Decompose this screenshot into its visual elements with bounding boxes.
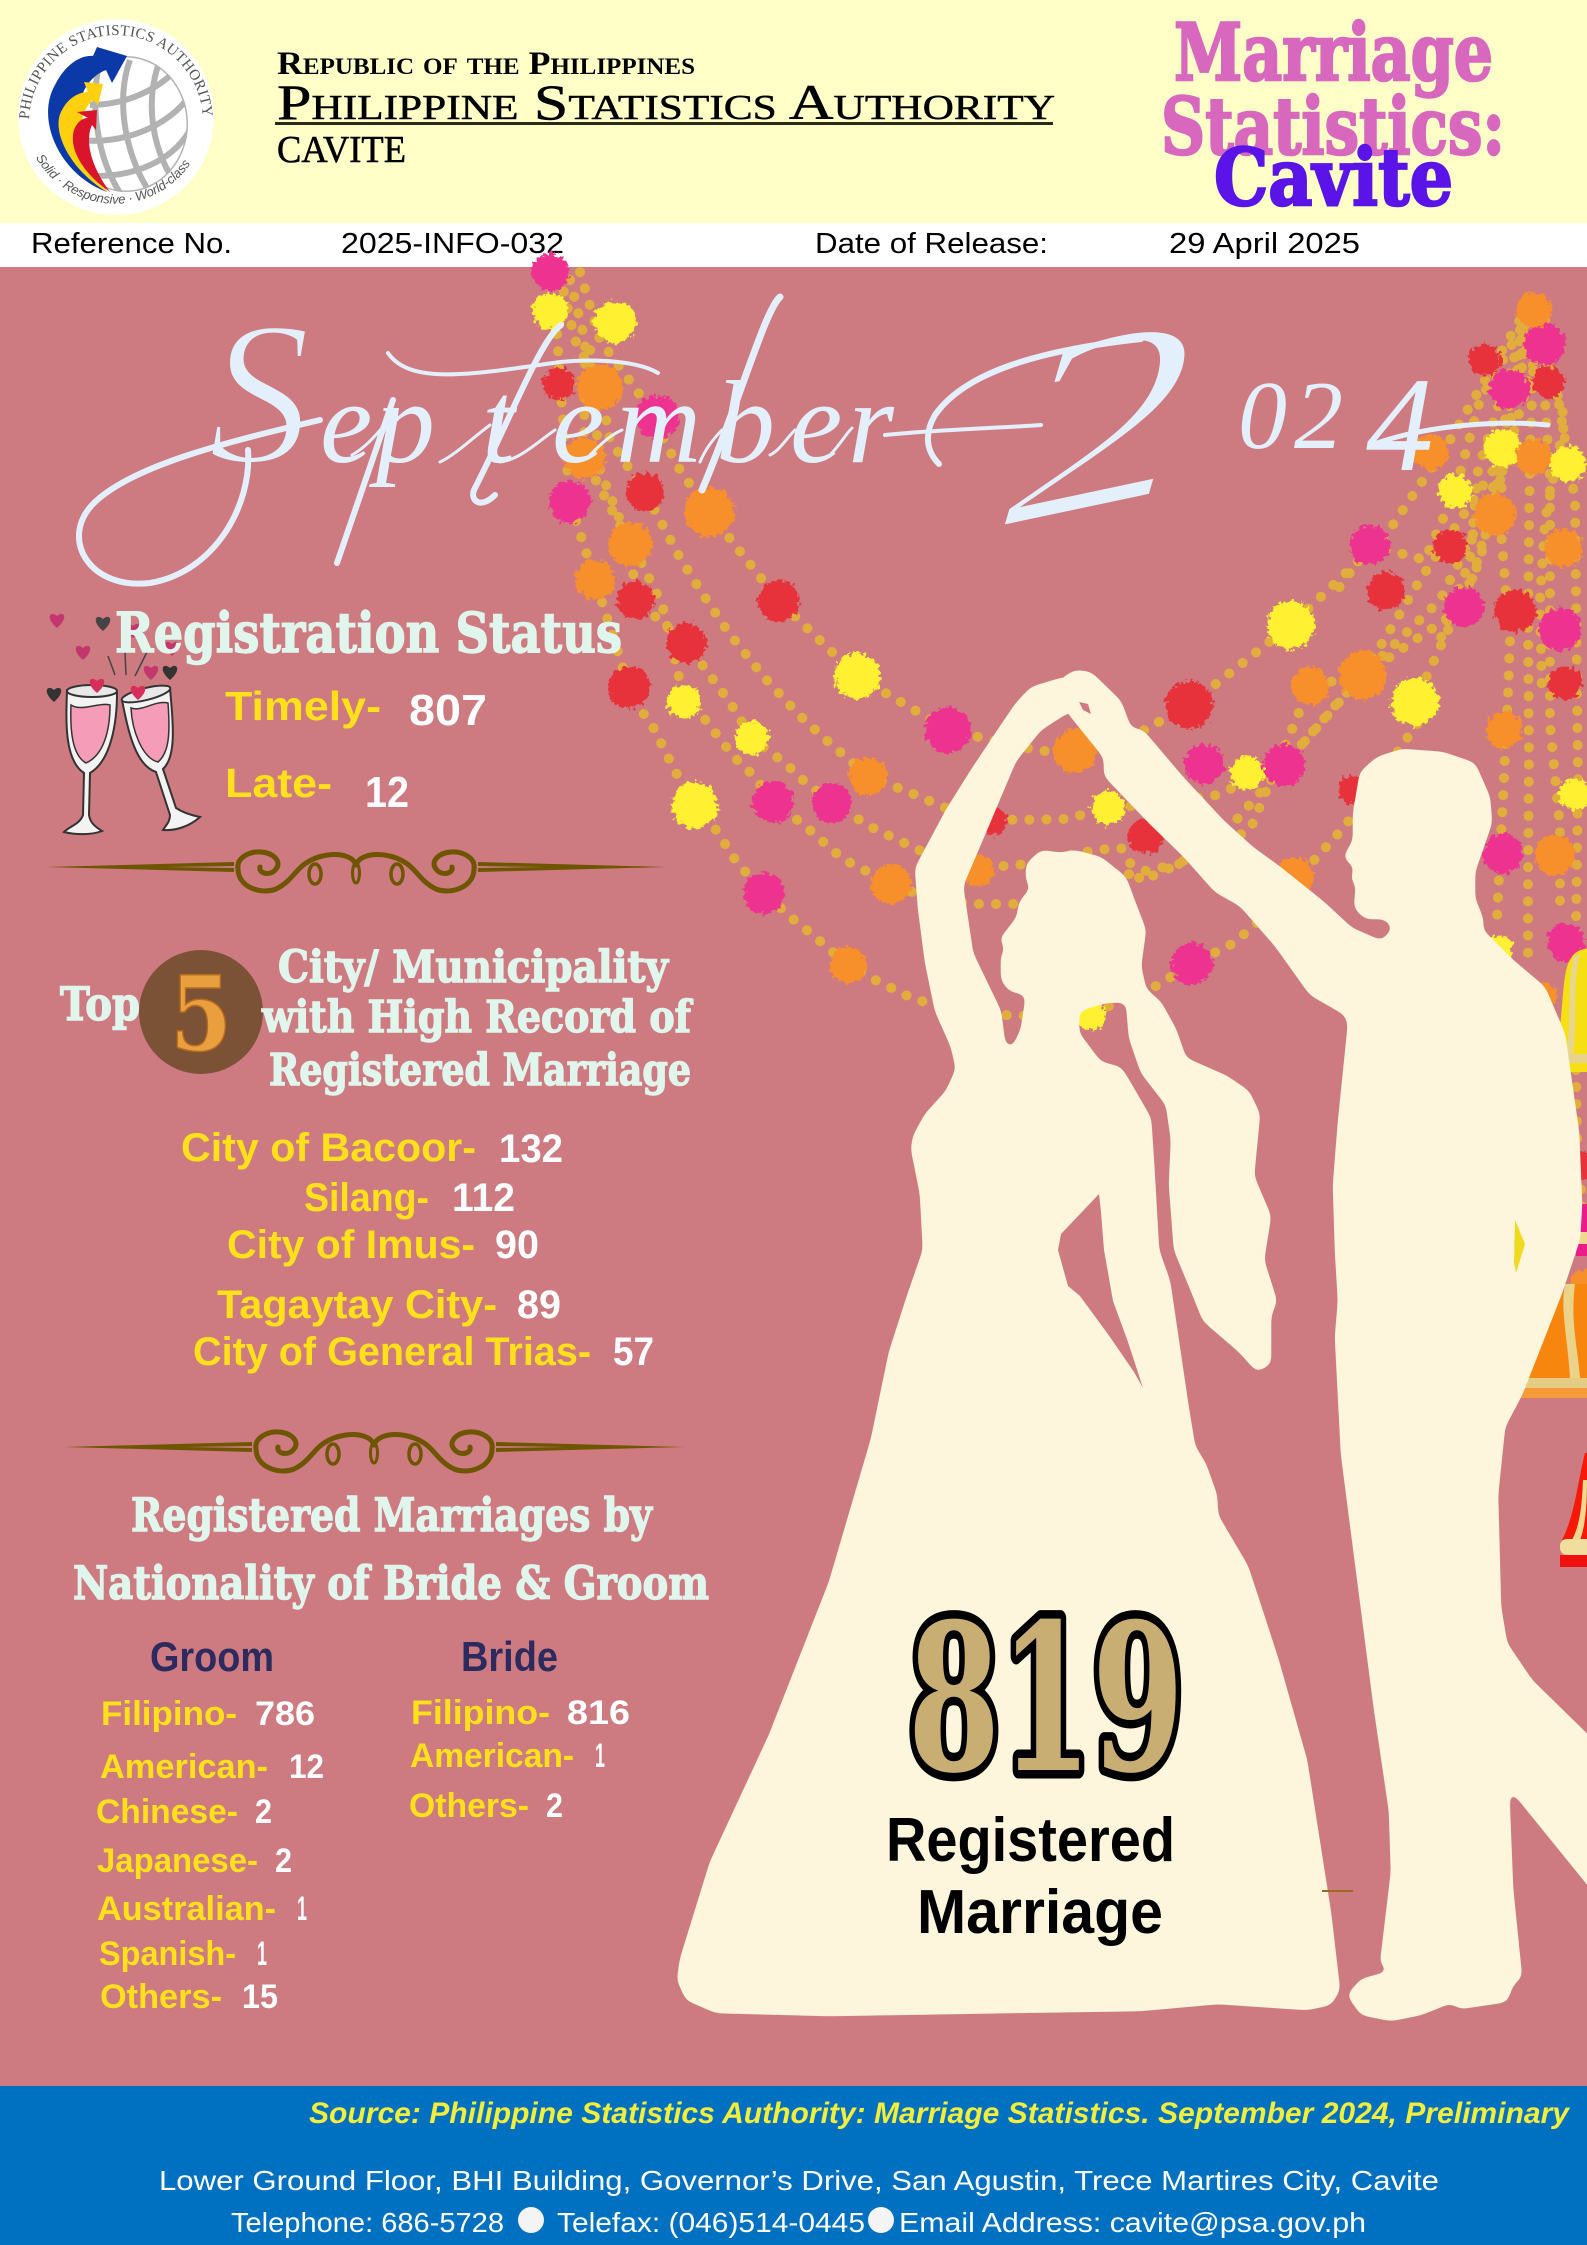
publication title: Marriage bbox=[1174, 6, 1493, 99]
title: September 2024: 4 bbox=[1366, 351, 1434, 500]
agency name block: CAVITE bbox=[277, 129, 406, 171]
list: groom nationality: 15 bbox=[242, 1978, 278, 2016]
agency name block bbox=[275, 46, 1055, 171]
list: groom nationality: 1 bbox=[257, 1935, 267, 1973]
list: groom nationality: 12 bbox=[289, 1748, 324, 1786]
title: September 2024 bbox=[79, 258, 1548, 584]
garland pom-poms bbox=[531, 253, 1587, 1298]
contact line: Telefax: (046)514-0445 bbox=[557, 2207, 865, 2238]
list: top 5 cities: City of Bacoor- bbox=[181, 1126, 476, 1170]
list: bride nationality: Bride bbox=[461, 1633, 558, 1680]
heading: registration status: Registration Status bbox=[115, 600, 622, 665]
key figure: 819 registered marriage: Registered bbox=[886, 1806, 1175, 1875]
agency name block: Republic of the Philippines bbox=[277, 46, 695, 82]
list: bride nationality bbox=[409, 1633, 630, 1825]
heading: nationality bbox=[73, 1488, 709, 1610]
list: groom nationality: Australian- bbox=[97, 1890, 276, 1928]
right glass bbox=[120, 682, 200, 830]
reference strip: Reference No. bbox=[31, 228, 232, 260]
ornamental divider 2 bbox=[64, 1432, 684, 1471]
waist gap in bride silhouette bbox=[1058, 1194, 1143, 1388]
list: groom nationality: 2 bbox=[255, 1793, 272, 1831]
list: groom nationality: Chinese- bbox=[96, 1793, 238, 1831]
key figure: 819 registered marriage: 819 bbox=[908, 1579, 1184, 1819]
list: top 5 cities: City of General Trias- bbox=[193, 1330, 591, 1374]
list: top 5 cities: City of Imus- bbox=[227, 1223, 475, 1267]
icon: wooden number 5 bbox=[139, 950, 263, 1075]
title: September 2024: 02 bbox=[1238, 362, 1343, 470]
key figure: 819 registered marriage: Marriage bbox=[917, 1878, 1163, 1947]
icon: wooden number 5: 5 bbox=[170, 954, 232, 1075]
heading: top 5: Registered Marriage bbox=[269, 1045, 691, 1096]
PSA logo: Solid · Responsive · World-class bbox=[36, 155, 190, 204]
small stray flourish end bbox=[1322, 1890, 1353, 1892]
agency name block: Philippine Statistics Authority bbox=[277, 74, 1055, 130]
heading: top 5: with High Record of bbox=[261, 992, 694, 1043]
heading: top 5 bbox=[60, 942, 694, 1096]
publication title bbox=[1161, 6, 1505, 224]
list: groom nationality: Japanese- bbox=[97, 1842, 258, 1880]
list: groom nationality: 1 bbox=[297, 1890, 307, 1928]
contact line: Email Address: cavite@psa.gov.ph bbox=[899, 2207, 1366, 2238]
registration status values: 12 bbox=[365, 768, 409, 817]
garland strings bbox=[555, 272, 1585, 1250]
left glass bbox=[64, 685, 117, 834]
silhouette: dancing bride bbox=[677, 674, 1340, 2016]
list: bride nationality: 1 bbox=[595, 1737, 605, 1775]
contact line bbox=[231, 2207, 1366, 2238]
registration status values bbox=[225, 683, 487, 817]
list: top 5 cities: 112 bbox=[452, 1176, 515, 1220]
hearts and sparkle lines bbox=[47, 614, 179, 702]
source note: Source: Philippine Statistics Authority: Marriage Statistics. September 2024, Preliminary bbox=[309, 2097, 1570, 2130]
header band bbox=[0, 0, 1587, 224]
registration status values: 807 bbox=[409, 686, 487, 735]
key figure: 819 registered marriage bbox=[886, 1579, 1184, 1947]
silhouette: dancing groom bbox=[1059, 670, 1587, 2021]
heading: nationality: Registered Marriages by bbox=[131, 1488, 653, 1542]
list: top 5 cities: 57 bbox=[613, 1330, 654, 1374]
reference strip bbox=[0, 223, 1587, 267]
publication title: Cavite bbox=[1214, 131, 1453, 224]
heading: nationality: Nationality of Bride & Groom bbox=[73, 1556, 709, 1610]
list: top 5 cities: 90 bbox=[495, 1223, 539, 1267]
gold shape at groom's hip bbox=[1514, 1220, 1525, 1273]
list: top 5 cities: Silang- bbox=[304, 1176, 429, 1220]
list: groom nationality: Spanish- bbox=[99, 1935, 236, 1973]
list: top 5 cities bbox=[181, 1126, 654, 1374]
hanging bells at right edge bbox=[1520, 948, 1587, 1567]
reference strip: Date of Release: bbox=[815, 228, 1048, 260]
title: September 2024: S bbox=[208, 280, 310, 507]
footer band bbox=[0, 2086, 1587, 2245]
champagne glasses icon bbox=[47, 614, 200, 834]
registration status values: Timely- bbox=[225, 683, 381, 729]
list: groom nationality: Groom bbox=[150, 1633, 274, 1680]
list: groom nationality: American- bbox=[100, 1748, 268, 1786]
reference strip: 29 April 2025 bbox=[1169, 228, 1360, 260]
reference strip: 2025-INFO-032 bbox=[341, 228, 564, 260]
contact line: Telephone: 686-5728 bbox=[231, 2207, 504, 2238]
list: bride nationality: 816 bbox=[567, 1694, 630, 1732]
registration status values: Late- bbox=[225, 760, 332, 806]
list: groom nationality bbox=[96, 1633, 324, 2016]
list: groom nationality: Others- bbox=[100, 1978, 222, 2016]
PSA logo bbox=[18, 19, 214, 215]
ornamental divider 1 bbox=[46, 852, 666, 891]
list: groom nationality: 786 bbox=[255, 1695, 315, 1733]
hand gap bbox=[1079, 702, 1091, 714]
list: top 5 cities: 132 bbox=[499, 1127, 563, 1171]
PSA logo: PHILIPPINE STATISTICS AUTHORITY bbox=[19, 25, 213, 119]
list: top 5 cities: Tagaytay City- bbox=[217, 1283, 497, 1327]
list: bride nationality: Others- bbox=[409, 1787, 529, 1825]
heading: top 5: City/ Municipality bbox=[278, 942, 669, 993]
title: September 2024: eptember bbox=[320, 357, 895, 488]
title: September 2024: 2 bbox=[997, 258, 1202, 584]
office address: Lower Ground Floor, BHI Building, Governor’s Drive, San Agustin, Trece Martires City, Cavite bbox=[159, 2165, 1439, 2196]
list: top 5 cities: 89 bbox=[517, 1283, 561, 1327]
list: bride nationality: American- bbox=[410, 1737, 574, 1775]
list: groom nationality: 2 bbox=[275, 1842, 292, 1880]
heading: top 5: Top bbox=[60, 977, 140, 1031]
list: bride nationality: 2 bbox=[546, 1787, 563, 1825]
list: groom nationality: Filipino- bbox=[101, 1695, 237, 1733]
list: bride nationality: Filipino- bbox=[411, 1694, 550, 1732]
